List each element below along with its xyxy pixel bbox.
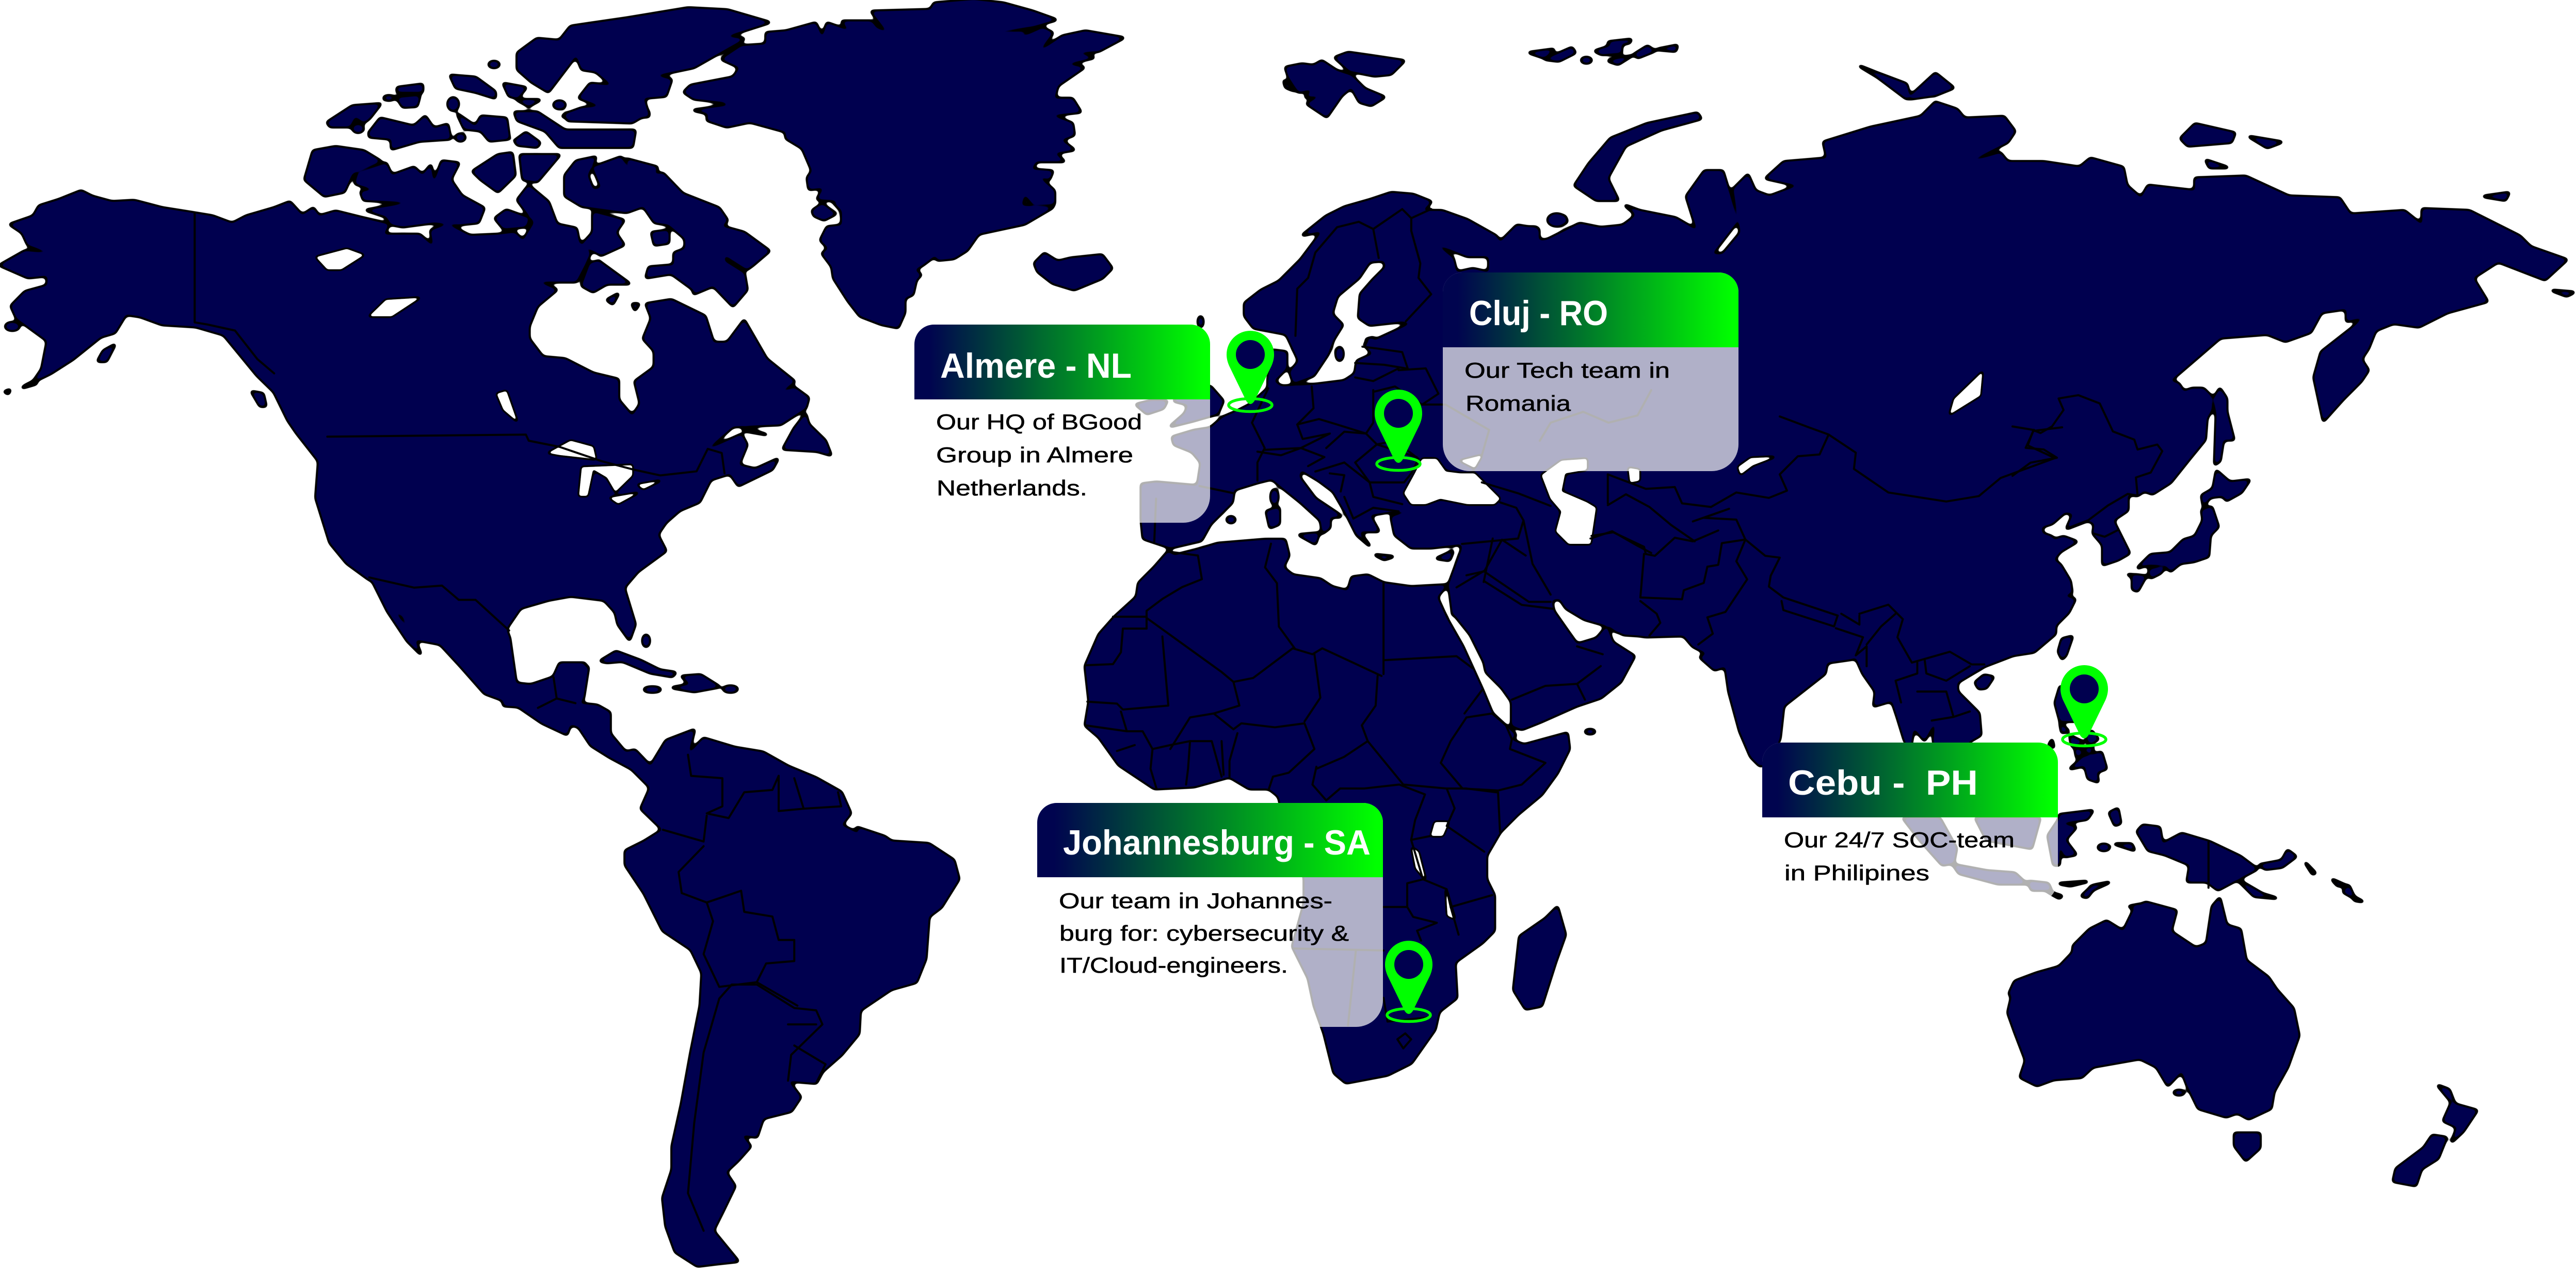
Almere heading: Almere - NL xyxy=(940,346,1132,385)
country borders xyxy=(195,209,2209,1231)
Cluj description: Our Tech team in xyxy=(1464,358,1670,382)
Cebu description xyxy=(1784,828,2015,885)
Cluj translucent body xyxy=(1443,272,1738,471)
Johannesburg translucent body xyxy=(1037,803,1383,1027)
panel: Almere - NL xyxy=(914,325,1210,523)
Johannesburg gradient header xyxy=(1037,803,1383,877)
Almere description: Netherlands. xyxy=(937,476,1087,500)
Almere description xyxy=(936,410,1142,500)
Cebu description: in Philipines xyxy=(1784,861,1929,885)
Johannesburg description: burg for: cybersecurity & xyxy=(1059,921,1349,945)
lakes and inland seas outline xyxy=(316,249,1983,919)
Cluj description: Romania xyxy=(1466,391,1571,415)
Johannesburg description: Our team in Johannes- xyxy=(1059,889,1332,913)
Cebu description: Our 24/7 SOC-team xyxy=(1784,828,2015,852)
panel: Johannesburg - SA xyxy=(1037,803,1383,1027)
Cebu heading: Cebu - PH xyxy=(1788,763,1978,802)
icon: map pin Cluj xyxy=(1375,390,1422,471)
icon: map pin Almere xyxy=(1227,331,1274,412)
icon: map pin Johannesburg xyxy=(1385,941,1432,1022)
Almere description: Group in Almere xyxy=(936,443,1133,467)
Johannesburg heading: Johannesburg - SA xyxy=(1063,823,1371,862)
panel: Cebu - PH xyxy=(1762,743,2058,905)
panel: Cluj - RO xyxy=(1443,272,1738,471)
Johannesburg description xyxy=(1059,889,1349,977)
Almere gradient header xyxy=(914,325,1210,399)
Cluj gradient header xyxy=(1443,272,1738,347)
Almere description: Our HQ of BGood xyxy=(936,410,1142,434)
Cluj heading: Cluj - RO xyxy=(1469,294,1608,333)
Johannesburg description: IT/Cloud-engineers. xyxy=(1059,953,1288,977)
Cebu translucent body xyxy=(1762,743,2058,905)
Cebu gradient header xyxy=(1762,743,2058,817)
Almere translucent body xyxy=(914,325,1210,523)
lakes and inland seas water xyxy=(316,249,1983,919)
Cluj description xyxy=(1464,358,1670,415)
icon: map pin Cebu xyxy=(2060,665,2108,746)
